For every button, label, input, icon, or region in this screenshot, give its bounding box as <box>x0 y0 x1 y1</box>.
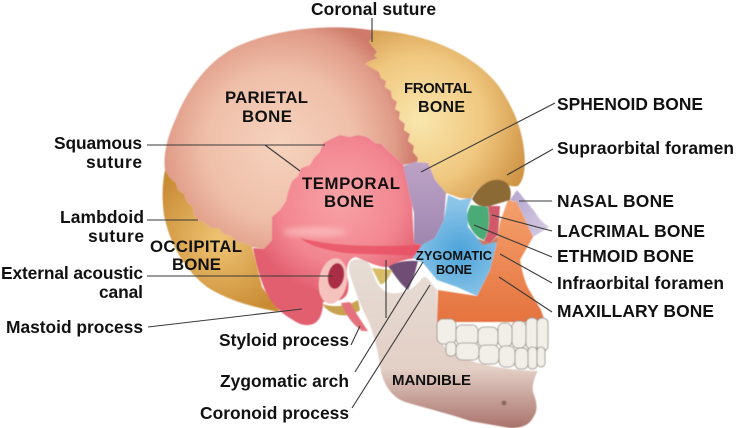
external acoustic canal <box>315 256 351 306</box>
bone: ethmoid <box>467 205 489 240</box>
label: zygomatic bone <box>416 248 492 277</box>
label: occipital bone: BONE <box>172 255 221 274</box>
bone: frontal <box>365 30 525 199</box>
label: temporal bone: TEMPORAL <box>302 174 400 193</box>
label: supraorbital foramen: Supraorbital foramen <box>557 138 734 158</box>
orbit <box>467 180 511 246</box>
bone: parietal <box>164 27 418 249</box>
temporal soft highlight <box>283 227 347 237</box>
label: squamous suture: suture <box>86 152 142 172</box>
bone: nasal <box>510 190 549 237</box>
bone: occipital small patch <box>372 268 392 284</box>
teeth <box>437 318 548 369</box>
label: occipital bone: OCCIPITAL <box>150 237 242 256</box>
label: lambdoid suture <box>60 207 144 246</box>
label: parietal bone <box>225 88 308 126</box>
label: occipital bone <box>150 237 242 274</box>
label: squamous suture <box>54 133 142 172</box>
label: parietal bone: PARIETAL <box>225 88 308 107</box>
label: external acoustic canal: canal <box>99 282 143 302</box>
bone: sphenoid lower wing <box>388 261 418 290</box>
canal opening <box>326 262 346 290</box>
label: mastoid process: Mastoid process <box>6 317 143 337</box>
label: temporal bone <box>302 174 400 211</box>
canal rim <box>315 256 351 306</box>
label: maxillary bone: MAXILLARY BONE <box>557 301 714 321</box>
bone: zygomatic <box>413 195 497 296</box>
label: zygomatic arch: Zygomatic arch <box>220 371 349 391</box>
label: zygomatic bone: ZYGOMATIC <box>416 248 492 263</box>
orbit floor <box>476 236 498 246</box>
label: nasal bone: NASAL BONE <box>557 191 674 211</box>
label: infraorbital foramen: Infraorbital foramen <box>557 273 724 293</box>
bone: lacrimal <box>484 206 500 243</box>
bone: occipital lower fragment <box>322 300 360 315</box>
label: lambdoid suture: Lambdoid <box>60 207 144 227</box>
label: frontal bone: BONE <box>418 99 465 116</box>
label: parietal bone: BONE <box>242 107 292 126</box>
bone: maxilla <box>437 200 545 322</box>
label: lambdoid suture: suture <box>88 226 144 246</box>
lower teeth <box>446 342 545 369</box>
label: frontal bone: FRONTAL <box>404 80 472 97</box>
styloid process <box>341 302 368 331</box>
label: ethmoid bone: ETHMOID BONE <box>557 246 694 266</box>
label: external acoustic canal <box>1 263 143 302</box>
label: lacrimal bone: LACRIMAL BONE <box>557 221 705 241</box>
label: mandible: MANDIBLE <box>392 372 471 389</box>
label: sphenoid bone: SPHENOID BONE <box>557 94 703 114</box>
skull illustration <box>163 27 549 428</box>
label: styloid process: Styloid process <box>219 330 349 350</box>
bone: mandible <box>349 259 538 428</box>
label: temporal bone: BONE <box>324 192 374 211</box>
label: frontal bone <box>404 80 472 116</box>
zygomatic arch shading <box>300 238 420 256</box>
bone: temporal <box>253 135 422 325</box>
label: zygomatic bone: BONE <box>436 262 472 277</box>
orbit dark upper cavity <box>472 180 511 207</box>
mental foramen <box>502 400 506 406</box>
label: coronoid process: Coronoid process <box>200 403 349 423</box>
bone: occipital <box>163 170 280 312</box>
leader lines <box>147 18 555 408</box>
upper teeth <box>437 318 548 351</box>
bone: sphenoid <box>403 162 446 245</box>
label: squamous suture: Squamous <box>54 133 142 153</box>
label: external acoustic canal: External acoustic <box>1 263 143 283</box>
